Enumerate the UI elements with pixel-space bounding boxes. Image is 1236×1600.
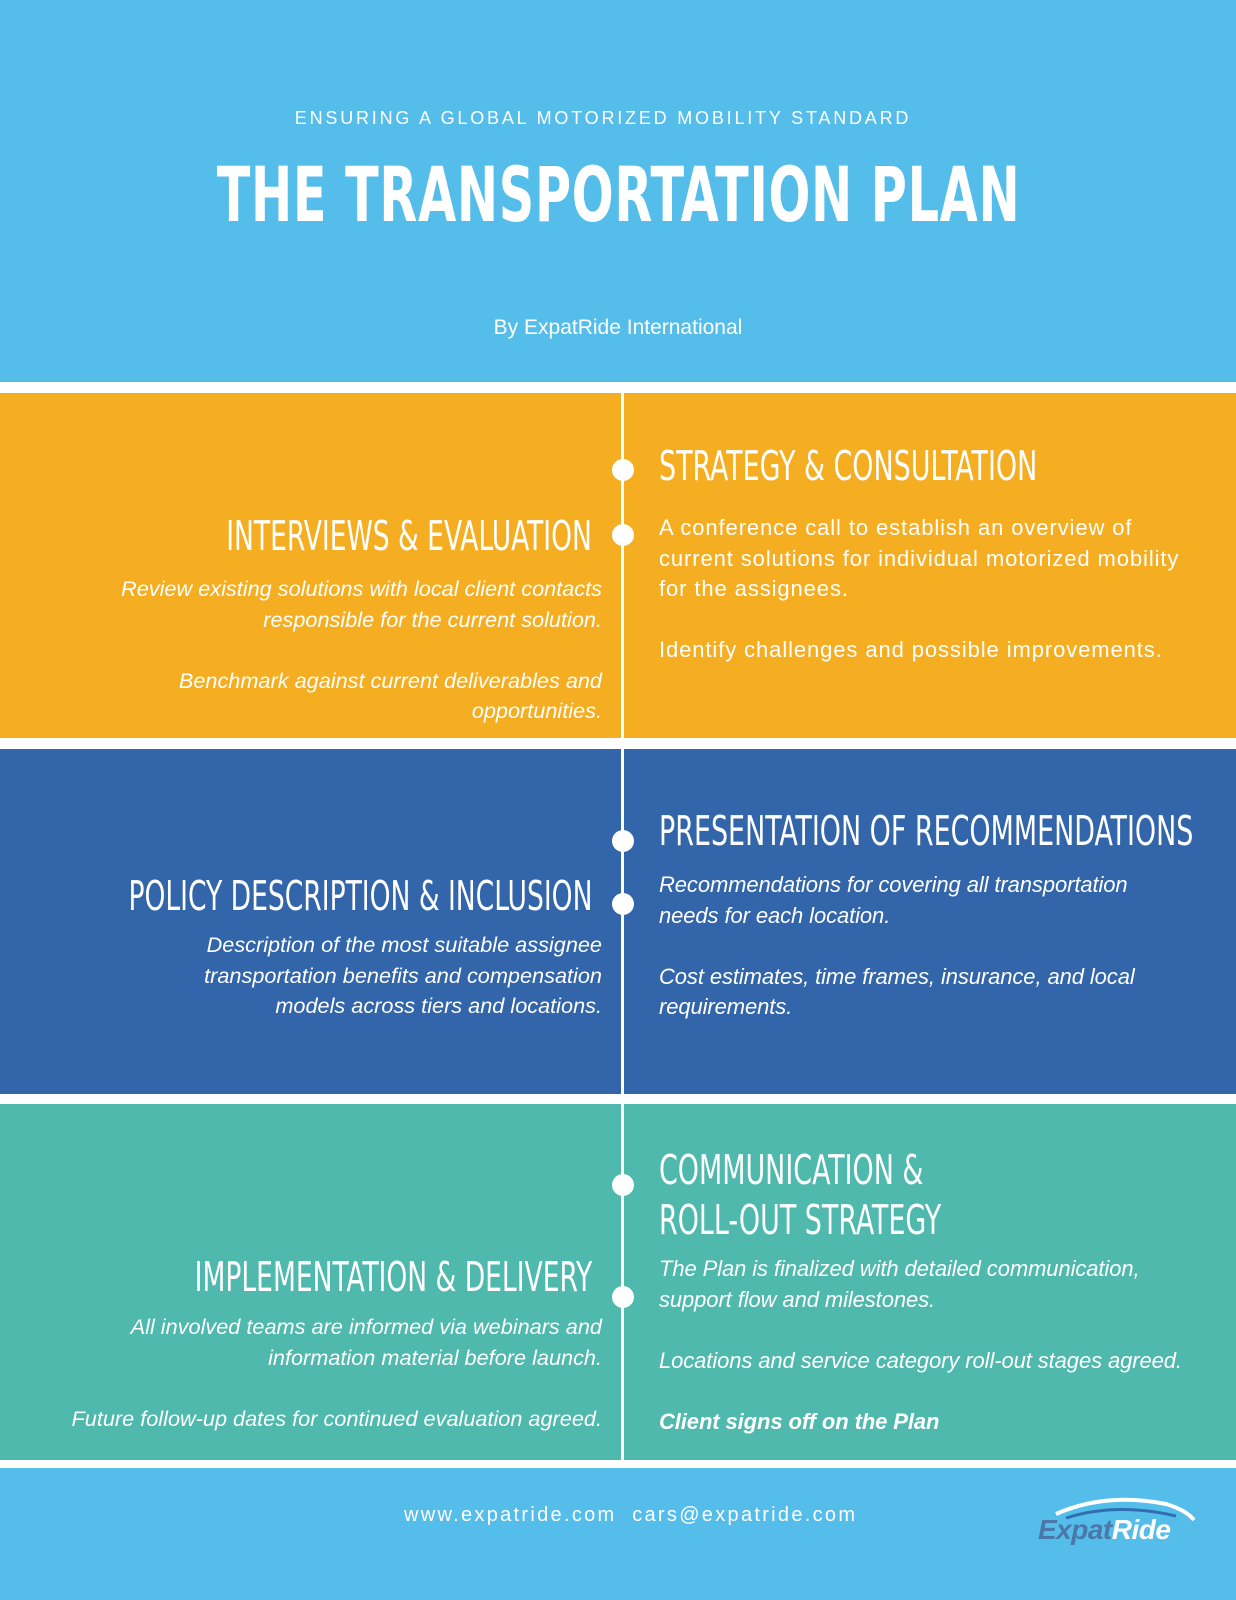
text: strategy: Identify challenges and possible improvements. (659, 637, 1163, 662)
text: strategy: A conference call to establish an overview of (659, 515, 1132, 540)
text: communication: support flow and milestones. (659, 1286, 935, 1312)
text: interviews: responsible for the current solution. (263, 606, 602, 632)
heading: implementation: IMPLEMENTATION & DELIVERY (194, 1253, 592, 1301)
heading: communication: COMMUNICATION & (659, 1146, 923, 1194)
heading: communication (659, 1146, 942, 1244)
text: implementation (72, 1314, 602, 1430)
text: interviews (121, 576, 602, 723)
text: presentation: Cost estimates, time frames, insurance, and local (659, 964, 1135, 988)
text: communication: The Plan is finalized with detailed communication, (659, 1256, 1139, 1281)
text: strategy: current solutions for individual motorized mobility (659, 546, 1179, 570)
text: interviews: Benchmark against current deliverables and (179, 668, 602, 692)
text: interviews: Review existing solutions with local client contacts (121, 576, 602, 601)
heading: presentation: PRESENTATION OF RECOMMENDATIONS (659, 807, 1193, 855)
logo: ExpatRide (1038, 1514, 1170, 1545)
timeline line (621, 393, 624, 1460)
panel: orange stage (0, 393, 1236, 738)
heading: policy: POLICY DESCRIPTION & INCLUSION (128, 872, 592, 920)
footer band (0, 1468, 1236, 1600)
text: strategy: for the assignees. (659, 576, 849, 601)
heading: interviews: INTERVIEWS & EVALUATION (226, 512, 592, 560)
text: policy: models across tiers and locations. (275, 993, 602, 1018)
header band (0, 0, 1236, 382)
subtitle: ENSURING A GLOBAL MOTORIZED MOBILITY STANDARD (295, 108, 911, 128)
text: policy: Description of the most suitable assignee (207, 932, 602, 957)
text: interviews: opportunities. (472, 698, 602, 723)
footer contacts: www.expatride.com cars@expatride.com (404, 1504, 857, 1526)
byline: By ExpatRide International (494, 316, 742, 339)
logo (1038, 1498, 1196, 1545)
text: implementation: Future follow-up dates for continued evaluation agreed. (72, 1406, 602, 1430)
text: policy: transportation benefits and compensation (204, 962, 602, 988)
text: presentation: Recommendations for covering all transportation (659, 872, 1128, 897)
text: strategy (659, 515, 1179, 662)
text: communication: Client signs off on the Plan (659, 1408, 939, 1434)
text: communication: Locations and service category roll-out stages agreed. (659, 1348, 1182, 1372)
panel: blue stage (0, 749, 1236, 1094)
title: THE TRANSPORTATION PLAN (217, 150, 1020, 239)
text: communication (659, 1256, 1182, 1434)
text: policy (204, 932, 602, 1018)
text: presentation: requirements. (659, 994, 792, 1019)
text: implementation: information material before launch. (268, 1344, 602, 1370)
text: presentation (659, 872, 1136, 1019)
heading: communication: ROLL-OUT STRATEGY (659, 1196, 941, 1244)
panel: teal stage (0, 1104, 1236, 1460)
text: implementation: All involved teams are informed via webinars and (131, 1314, 602, 1339)
text: presentation: needs for each location. (659, 902, 890, 928)
heading: strategy: STRATEGY & CONSULTATION (659, 442, 1037, 490)
